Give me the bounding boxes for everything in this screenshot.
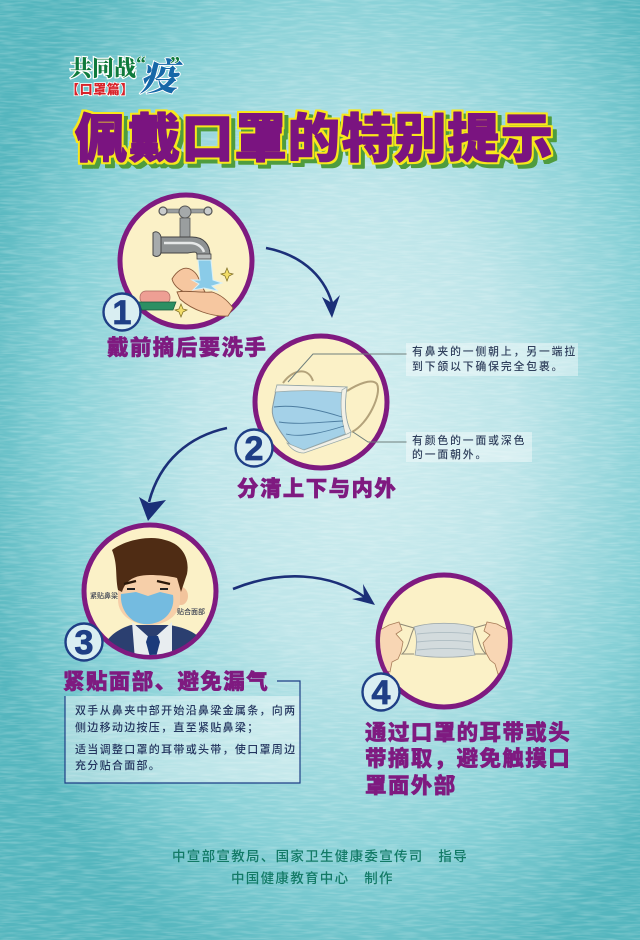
heading: step 4: [365, 720, 571, 798]
footer credits: 中国健康教育中心 制作: [231, 870, 394, 886]
heading: step 2: 分清上下与内外: [237, 477, 397, 501]
footer credits: [172, 848, 468, 886]
logo closing quote: ”: [170, 53, 180, 75]
icon: hands: [172, 268, 233, 316]
heading: step 4: 通过口罩的耳带或头: [365, 720, 571, 745]
icon: sparkles: [175, 268, 233, 317]
badge: number 4: 4: [372, 674, 391, 712]
heading: step 3: 紧贴面部、避免漏气: [63, 669, 269, 694]
callout: nose clip side up: 有鼻夹的一侧朝上，另一端拉: [412, 344, 577, 358]
badge: number 1: [104, 294, 140, 332]
heading: step 1: 戴前摘后要洗手: [107, 335, 267, 360]
circle frame: [120, 195, 252, 327]
text block: fitting instructions: 侧边移动边按压，直至紧贴鼻梁；: [75, 720, 260, 734]
logo opening quote: “: [136, 53, 146, 75]
logo text: fight the epidemic together: 共同战: [70, 56, 136, 81]
icon: surgical mask: [272, 385, 351, 453]
panel: step 4 removal: [378, 575, 510, 707]
circle frame: [84, 525, 216, 657]
callout: coloured side out: 的一面朝外。: [412, 447, 488, 461]
leader line: coloured side note: [353, 432, 407, 442]
panel: step 2 mask orientation: [255, 336, 387, 468]
badge: number 4: [362, 674, 400, 712]
series logo: [66, 53, 183, 99]
heading: step 4: 罩面外部: [365, 773, 457, 798]
arrow: step 1 to step 2: [266, 248, 340, 318]
illustration: hands holding mask by ear straps: [378, 622, 510, 674]
icon: faucet: [153, 206, 212, 259]
callout: nose clip side up: 到下颌以下确保完全包裹。: [412, 359, 564, 373]
logo subtitle: 【口罩篇】: [66, 82, 134, 97]
arrow: step 3 to step 4: [233, 576, 375, 605]
illustration: man wearing mask: [108, 538, 196, 655]
title: 佩戴口罩的特别提示: [75, 111, 554, 169]
text block: fitting instructions: [65, 681, 300, 783]
leader line: nose clip note: [288, 354, 407, 382]
callout: coloured side out: 有颜色的一面或深色: [412, 433, 526, 447]
text block: fitting instructions: 充分贴合面部。: [75, 758, 161, 772]
icon: water: [192, 260, 222, 291]
icon: ear loops: [283, 371, 378, 432]
icon: soap and dish: [138, 291, 176, 310]
badge: number 2: [236, 430, 272, 468]
callout: nose clip side up: [406, 343, 578, 376]
badge: number 3: 3: [75, 624, 93, 662]
text block: fitting instructions: 双手从鼻夹中部开始沿鼻梁金属条，向两: [75, 703, 296, 717]
circle frame: [255, 336, 387, 468]
circle frame: [378, 575, 510, 707]
label: press nose bridge: 紧贴鼻梁: [90, 591, 118, 600]
panel: step 3 fit to face: [84, 525, 216, 660]
badge: number 2: 2: [245, 430, 263, 468]
heading: step 4: 带摘取，避免触摸口: [365, 746, 571, 771]
panel: step 1 wash hands: [120, 195, 252, 327]
callout: coloured side out: [406, 432, 532, 462]
badge: number 1: 1: [113, 294, 131, 332]
logo calligraphic character: 疫: [140, 57, 183, 99]
arrow: step 2 to step 3: [139, 428, 227, 521]
label: fit to face: 贴合面部: [177, 607, 205, 616]
badge: number 3: [66, 624, 102, 662]
text block: fitting instructions: 适当调整口罩的耳带或头带，使口罩周边: [75, 742, 296, 756]
footer credits: 中宣部宣教局、国家卫生健康委宣传司 指导: [172, 848, 468, 864]
